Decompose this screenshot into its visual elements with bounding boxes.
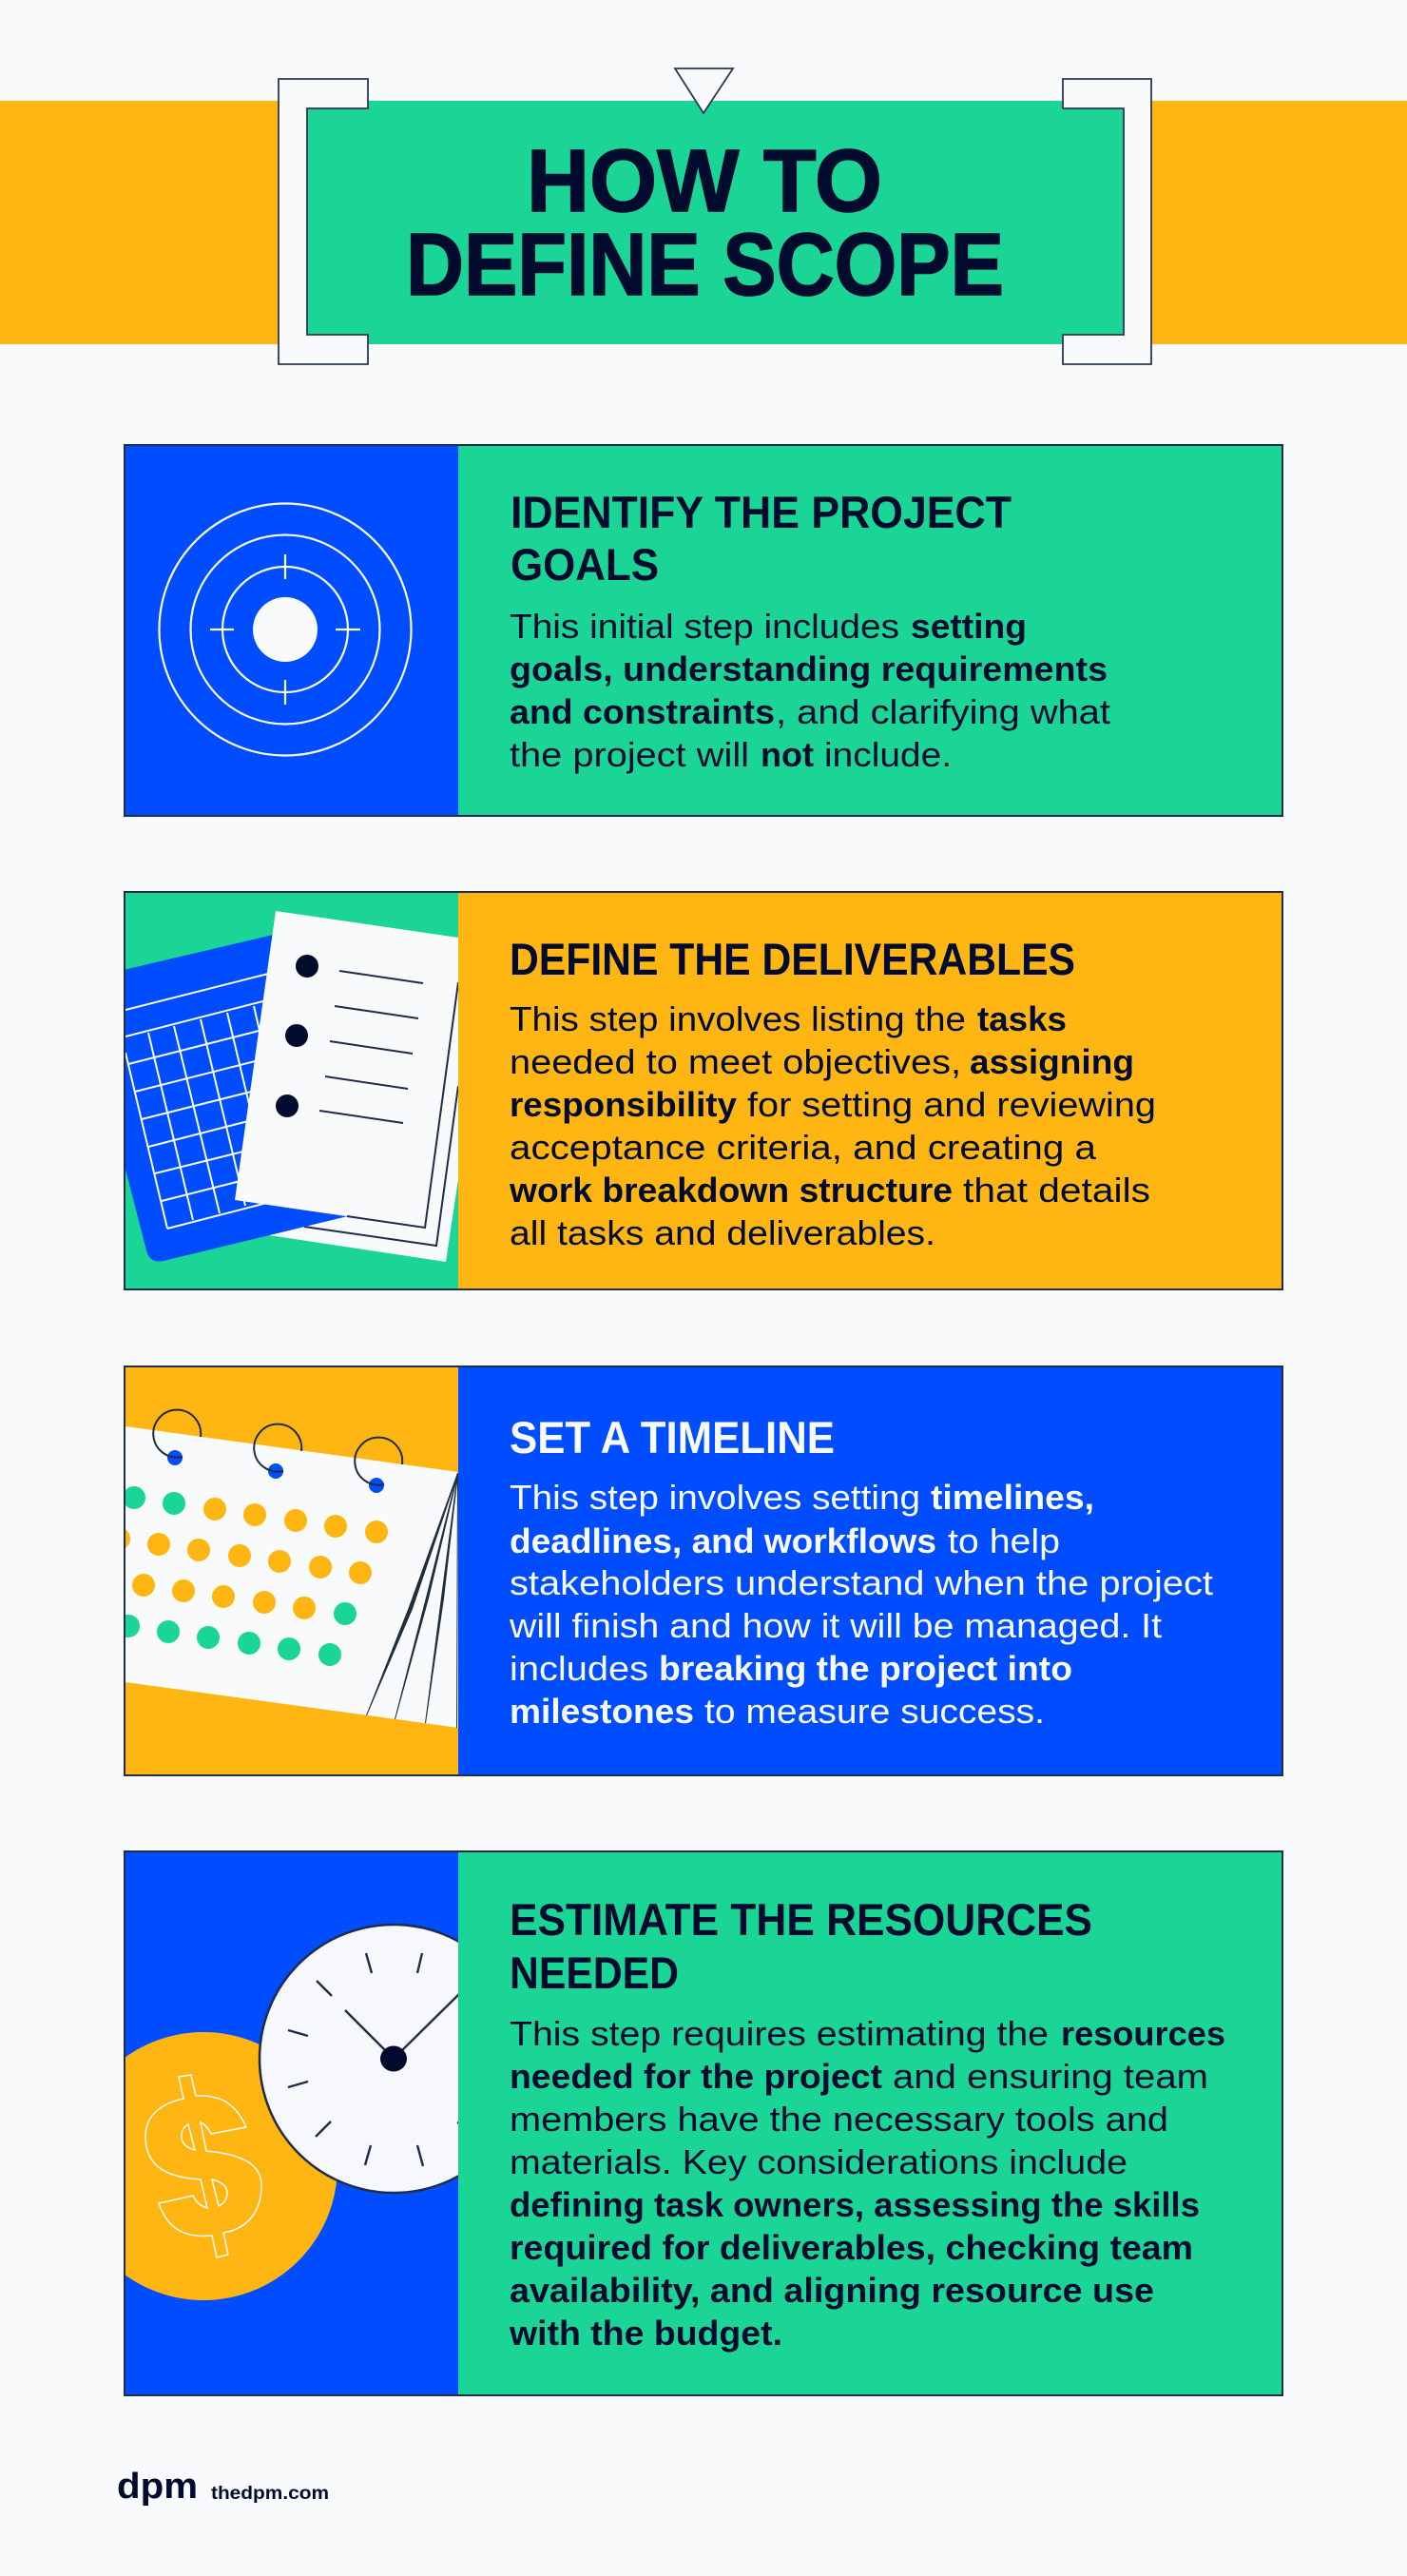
body text: [510, 607, 1110, 774]
header banner: [0, 68, 1407, 364]
body text: needed to meet objectives,: [510, 1042, 961, 1081]
body text: setting: [911, 607, 1027, 646]
body text: and ensuring team: [893, 2057, 1208, 2096]
heading: NEEDED: [510, 1947, 679, 1998]
body text: [509, 999, 1156, 1252]
body text: This step involves listing the: [510, 999, 966, 1038]
body text: acceptance criteria, and creating a: [510, 1128, 1097, 1167]
body text: that details: [963, 1171, 1150, 1210]
heading: IDENTIFY THE PROJECT: [511, 487, 1012, 537]
body text: required for deliverables, checking team: [510, 2228, 1193, 2267]
body text: includes: [510, 1649, 648, 1688]
body text: and constraints: [510, 692, 775, 731]
body text: will finish and how it will be managed. It: [509, 1606, 1162, 1645]
body text: assigning: [970, 1042, 1134, 1081]
body text: work breakdown structure: [509, 1171, 953, 1210]
body text: timelines,: [931, 1478, 1094, 1517]
image background: [125, 1366, 458, 1775]
icon: tablet and checklist: [124, 911, 458, 1262]
body text: members have the necessary tools and: [510, 2100, 1168, 2139]
body text: responsibility: [510, 1085, 737, 1124]
right bracket: [1063, 79, 1151, 364]
body text: breaking the project into: [659, 1649, 1072, 1688]
panel border: [125, 445, 1282, 816]
body text: , and clarifying what: [776, 692, 1110, 731]
panel: define the deliverables: [124, 892, 1282, 1289]
panel: estimate the resources needed: [69, 1851, 1282, 2395]
body text: not: [761, 735, 814, 774]
body text: the project will: [510, 735, 749, 774]
body text: milestones: [510, 1692, 694, 1731]
heading: DEFINE THE DELIVERABLES: [510, 934, 1075, 984]
body text: goals, understanding requirements: [510, 649, 1108, 688]
body text: This step involves setting: [510, 1478, 920, 1517]
icon: calendar: [107, 1410, 458, 1728]
body text: deadlines, and workflows: [510, 1521, 936, 1560]
heading: [510, 1894, 1092, 1998]
image background: [125, 1851, 458, 2395]
text background: [458, 445, 1282, 816]
image background: [125, 445, 458, 816]
text background: [458, 1851, 1282, 2395]
body text: defining task owners, assessing the skills: [510, 2185, 1200, 2224]
panel border: [125, 1851, 1282, 2395]
body text: This step requires estimating the: [510, 2014, 1049, 2053]
panel: set a timeline: [107, 1366, 1282, 1775]
left bracket: [279, 79, 368, 364]
green title panel: [307, 101, 1124, 344]
body text: This initial step includes: [510, 607, 899, 646]
heading: GOALS: [511, 539, 659, 590]
body text: all tasks and deliverables.: [510, 1213, 935, 1252]
image background: [125, 892, 458, 1289]
title: [406, 131, 1004, 314]
text background: [458, 1366, 1282, 1775]
title: HOW TO: [527, 131, 882, 230]
body text: to help: [948, 1521, 1060, 1560]
body text: with the budget.: [509, 2314, 782, 2353]
panel border: [125, 1366, 1282, 1775]
icon: target: [160, 504, 411, 755]
logo: dpm: dpm: [117, 2467, 198, 2507]
body text: to measure success.: [704, 1692, 1045, 1731]
panel border: [125, 892, 1282, 1289]
body text: needed for the project: [510, 2057, 882, 2096]
icon: coin and clock: [125, 1923, 458, 2300]
panel: identify the project goals: [125, 445, 1282, 816]
triangle marker: [675, 68, 733, 113]
body text: [509, 2014, 1225, 2353]
body text: include.: [824, 735, 952, 774]
body text: resources: [1061, 2014, 1225, 2053]
heading: [511, 487, 1012, 590]
heading: ESTIMATE THE RESOURCES: [510, 1894, 1092, 1945]
body text: for setting and reviewing: [747, 1085, 1156, 1124]
heading: SET A TIMELINE: [510, 1412, 835, 1462]
body text: stakeholders understand when the project: [510, 1563, 1213, 1602]
body text: availability, and aligning resource use: [510, 2271, 1154, 2310]
footer: [117, 2467, 329, 2507]
text background: [458, 892, 1282, 1289]
body text: [509, 1478, 1213, 1731]
body text: materials. Key considerations include: [510, 2142, 1128, 2181]
body text: tasks: [977, 999, 1067, 1038]
yellow band: [0, 101, 1407, 344]
title: DEFINE SCOPE: [406, 215, 1004, 314]
website: thedpm.com: [211, 2484, 329, 2504]
